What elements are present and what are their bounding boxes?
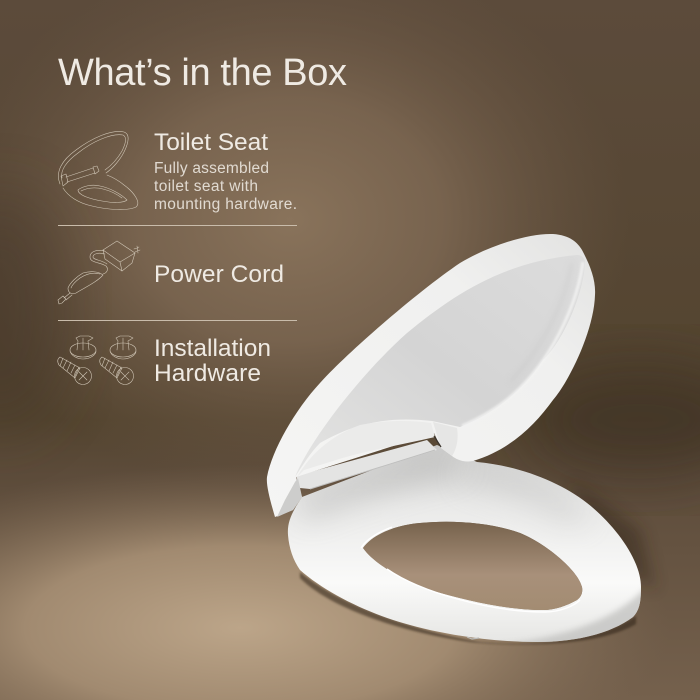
heading: toilet seat: Toilet Seat xyxy=(154,129,268,156)
icon: hardware xyxy=(58,336,136,384)
heading: installation hardware: Hardware xyxy=(154,360,261,387)
product: toilet seat xyxy=(267,234,648,658)
seat ring xyxy=(288,445,641,642)
icon: toilet seat xyxy=(58,131,138,210)
divider xyxy=(58,225,297,226)
item: toilet seat xyxy=(58,129,297,213)
lid inner lip shade xyxy=(462,262,583,426)
heading: installation hardware xyxy=(154,335,271,387)
description: toilet seat: mounting hardware. xyxy=(154,196,297,213)
bumper xyxy=(467,637,479,639)
item: power cord xyxy=(58,241,284,304)
heading: installation hardware: Installation xyxy=(154,335,271,362)
divider xyxy=(58,320,297,321)
hinge bar xyxy=(296,440,437,489)
description: toilet seat: toilet seat with xyxy=(154,178,258,195)
right lid knuckle xyxy=(433,422,458,456)
hole rim highlight xyxy=(361,527,580,612)
description: toilet seat xyxy=(154,160,297,213)
lid hinge cover xyxy=(297,421,435,477)
title: What’s in the Box xyxy=(58,52,347,94)
item: installation hardware xyxy=(58,335,271,387)
seat hole xyxy=(363,522,582,610)
lid outer xyxy=(267,234,595,517)
seat shading xyxy=(300,450,648,658)
description: toilet seat: Fully assembled xyxy=(154,160,269,177)
lid underside xyxy=(295,255,585,477)
left hinge xyxy=(277,478,302,517)
contact shadow xyxy=(300,572,636,644)
heading: power cord: Power Cord xyxy=(154,261,284,288)
icon: power cord xyxy=(58,241,140,304)
